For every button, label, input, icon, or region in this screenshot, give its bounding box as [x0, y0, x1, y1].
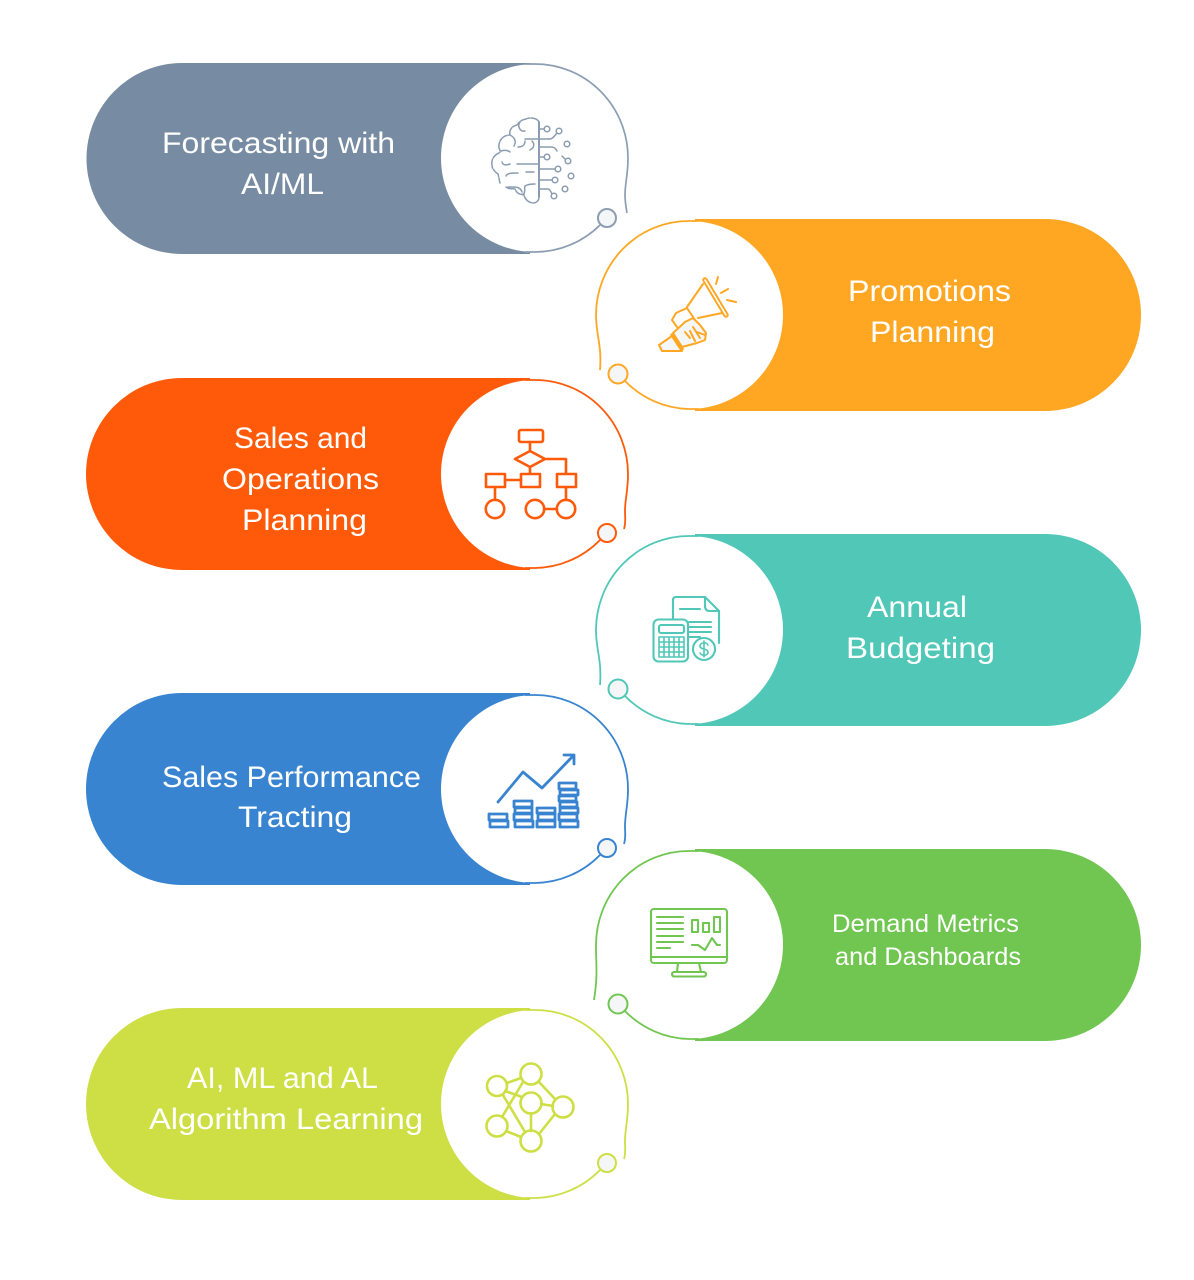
label: [848, 275, 1011, 349]
label: Algorithm Learning: [149, 1103, 423, 1136]
ring with node: [596, 536, 699, 724]
pill background: [86, 378, 530, 570]
icon: flowchart: [486, 430, 576, 518]
ring with node: [596, 221, 699, 409]
panel: Demand Metrics and Dashboards: [594, 849, 1141, 1041]
pill background: [695, 849, 1141, 1041]
panel: Sales and Operations Planning: [86, 378, 629, 570]
white circle: [441, 380, 629, 568]
label: Planning: [870, 316, 995, 349]
panel: Sales Performance Tracting: [86, 693, 629, 885]
panel: Annual Budgeting: [595, 534, 1141, 726]
pill background: [86, 1008, 530, 1200]
label: AI/ML: [241, 168, 324, 201]
ring with node: [594, 851, 699, 1039]
label: Operations: [222, 463, 379, 496]
white circle: [595, 221, 783, 409]
white circle: [441, 1010, 629, 1198]
label: Forecasting with: [162, 127, 395, 160]
label: Annual: [867, 591, 967, 624]
label: Sales Performance: [162, 761, 421, 794]
panel: Forecasting with AI/ML: [87, 63, 629, 254]
label: Planning: [242, 504, 367, 537]
label: [846, 591, 995, 665]
white circle: [595, 536, 783, 724]
icon: brain circuit: [492, 118, 574, 203]
pill background: [695, 219, 1141, 411]
label: [832, 910, 1021, 971]
pill background: [695, 534, 1141, 726]
icon: megaphone in hand: [659, 277, 736, 351]
ring with node: [525, 380, 628, 568]
ring with node: [525, 1010, 628, 1198]
icon: growth arrow and coin stacks: [489, 755, 578, 827]
label: Budgeting: [846, 632, 995, 665]
ring with node: [525, 695, 628, 883]
ring with node: [525, 64, 628, 252]
icon: monitor dashboard: [651, 909, 727, 976]
label: Sales and: [234, 422, 367, 455]
label: [149, 1062, 423, 1136]
white circle: [441, 64, 629, 252]
pill background: [87, 63, 530, 254]
label: AI, ML and AL: [187, 1062, 378, 1095]
label: and Dashboards: [835, 943, 1021, 971]
label: Demand Metrics: [832, 910, 1019, 938]
label: Tracting: [238, 801, 352, 834]
label: [162, 761, 421, 834]
label: [222, 422, 379, 537]
panel: AI, ML and AL Algorithm Learning: [86, 1008, 629, 1200]
pill background: [86, 693, 530, 885]
white circle: [441, 695, 629, 883]
label: Promotions: [848, 275, 1011, 308]
white circle: [595, 851, 783, 1039]
label: [162, 127, 395, 201]
icon: calculator and invoice: [654, 597, 719, 662]
icon: neural network: [486, 1064, 574, 1152]
panel: Promotions Planning: [595, 219, 1141, 411]
